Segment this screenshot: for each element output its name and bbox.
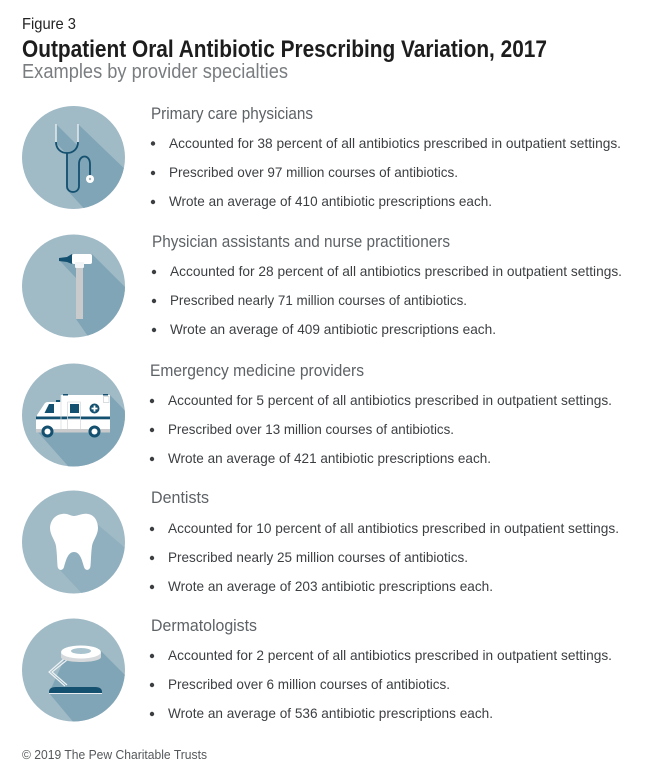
panel: dermatologists: [22, 616, 612, 730]
bullet list: Prescribed nearly 25 million courses of antibiotics.: [168, 549, 468, 565]
icon: stethoscope: [22, 106, 130, 215]
bullet list: Wrote an average of 421 antibiotic prescriptions each.: [168, 450, 491, 466]
bullet list: [150, 647, 612, 721]
icon: magnifying lamp: [22, 618, 125, 722]
heading: Dermatologists: [151, 616, 257, 635]
bullet list: [152, 263, 622, 337]
panel: dentists: [22, 488, 619, 600]
heading: Dentists: [151, 488, 209, 507]
subtitle: Examples by provider specialties: [22, 61, 288, 83]
footer: copyright: © 2019 The Pew Charitable Trusts: [22, 747, 207, 762]
bullet list: Wrote an average of 536 antibiotic prescriptions each.: [168, 705, 493, 721]
bullet list: Prescribed over 6 million courses of antibiotics.: [168, 676, 450, 692]
bullet list: Prescribed over 97 million courses of antibiotics.: [169, 164, 458, 180]
bullet list: Wrote an average of 203 antibiotic prescriptions each.: [168, 578, 493, 594]
panel: emergency medicine providers: [22, 361, 612, 475]
bullet list: [150, 392, 612, 466]
figure label: Figure 3: [22, 16, 76, 33]
bullet list: [150, 520, 619, 594]
heading: Primary care physicians: [151, 104, 313, 123]
bullet list: Wrote an average of 410 antibiotic prescriptions each.: [169, 193, 492, 209]
heading: Emergency medicine providers: [150, 361, 364, 380]
bullet list: Prescribed nearly 71 million courses of antibiotics.: [170, 292, 467, 308]
bullet list: Wrote an average of 409 antibiotic prescriptions each.: [170, 321, 496, 337]
bullet list: Accounted for 38 percent of all antibiotics prescribed in outpatient settings.: [169, 135, 621, 151]
icon: otoscope: [22, 234, 125, 338]
panel: physician assistants and nurse practitioners: [22, 232, 622, 345]
bullet list: [151, 135, 621, 209]
bullet list: Prescribed over 13 million courses of antibiotics.: [168, 421, 454, 437]
icon: ambulance: [22, 364, 125, 466]
bullet list: Accounted for 10 percent of all antibiotics prescribed in outpatient settings.: [168, 520, 619, 536]
icon: tooth: [22, 490, 125, 594]
heading: Physician assistants and nurse practitioners: [152, 232, 450, 251]
bullet list: Accounted for 2 percent of all antibiotics prescribed in outpatient settings.: [168, 647, 612, 663]
title: Outpatient Oral Antibiotic Prescribing Variation, 2017: [22, 36, 547, 63]
bullet list: Accounted for 28 percent of all antibiotics prescribed in outpatient settings.: [170, 263, 622, 279]
bullet list: Accounted for 5 percent of all antibiotics prescribed in outpatient settings.: [168, 392, 612, 408]
panel: primary care physicians: [22, 104, 621, 215]
